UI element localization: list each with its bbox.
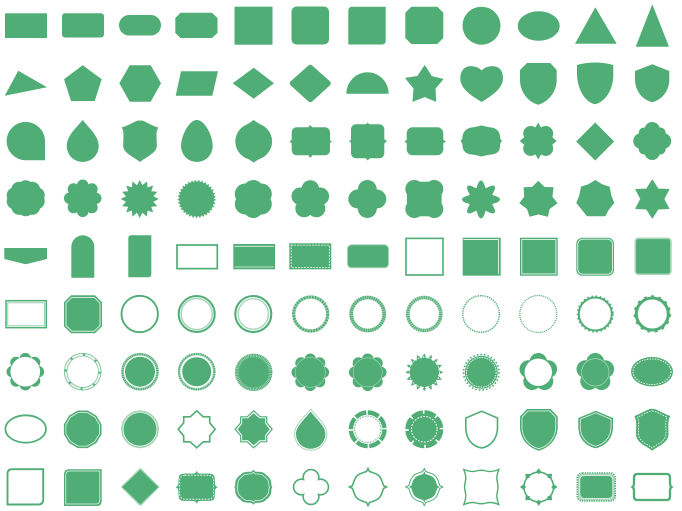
row 6: frames and rings — [6, 295, 670, 333]
plain ring — [122, 296, 158, 332]
row 5: banners and frames — [4, 235, 671, 278]
thin double ring with dots — [64, 353, 101, 390]
octagon with inset — [64, 295, 102, 333]
row 3: drops and ornate shapes — [7, 120, 671, 162]
seal with dotted rim — [179, 354, 214, 390]
burst seal — [405, 353, 443, 391]
seal with dashed rim — [122, 354, 158, 389]
triangle — [575, 7, 617, 44]
notched ring — [578, 296, 613, 332]
ornate fancy badge — [234, 470, 272, 505]
tall rectangle — [128, 235, 151, 277]
scalene triangle — [5, 71, 47, 96]
circle — [462, 7, 500, 45]
two-corner rounded square — [348, 7, 386, 44]
filled segmented badge — [408, 412, 441, 446]
semicircle — [346, 72, 389, 94]
starburst — [121, 180, 159, 218]
rounded square — [292, 6, 329, 44]
ring with dots — [179, 296, 215, 332]
chamfered square — [405, 7, 443, 44]
pinched square — [405, 180, 443, 218]
fancy dashed shield — [634, 409, 670, 451]
wavy frame — [464, 470, 499, 504]
filled square with inset — [64, 469, 102, 506]
dashed rectangle — [289, 243, 331, 269]
five petal flower — [292, 180, 329, 217]
beaded ring light — [408, 298, 441, 330]
tall triangle — [636, 4, 669, 47]
rounded rectangle — [62, 13, 104, 38]
clover — [348, 180, 386, 218]
outline rectangle — [177, 245, 217, 269]
outline eight point star — [178, 411, 215, 448]
shield curved top — [577, 62, 613, 104]
ring with ornaments — [520, 468, 558, 506]
ornate rectangle — [290, 125, 332, 158]
six lobe cloud — [235, 180, 272, 218]
filled square line top right — [463, 238, 501, 276]
drop with outline — [294, 409, 327, 450]
concave diamond outline — [350, 468, 386, 506]
six lobe flower — [7, 180, 45, 216]
pointed shield with inset — [578, 411, 613, 448]
scalloped ring — [6, 353, 44, 391]
row 9: ornate frames — [8, 468, 672, 506]
ellipse — [518, 11, 560, 41]
square diamond — [576, 122, 614, 160]
rounded diamond — [292, 68, 328, 100]
beaded ring — [351, 298, 384, 330]
row 4: flowers and stars — [7, 180, 669, 218]
quatrefoil outline — [294, 470, 328, 504]
pill — [119, 15, 161, 36]
outline ellipse — [5, 415, 46, 443]
filled rounded square with inset — [576, 238, 614, 276]
eight lobe flower — [64, 180, 102, 217]
filled square with light border — [635, 238, 671, 274]
ornate dashed plaque — [176, 471, 218, 504]
circle with light rim — [122, 411, 158, 447]
arch — [71, 235, 94, 278]
filled rectangle with lines — [233, 244, 275, 269]
egg — [181, 120, 213, 162]
row 8: outlined and inset badges — [5, 409, 670, 451]
seal with fine rim — [237, 355, 271, 389]
filled shield with inset — [520, 409, 558, 451]
rectangle — [5, 13, 47, 38]
flared outline plaque — [632, 474, 672, 500]
bumped ring — [634, 296, 670, 332]
diamond — [233, 68, 274, 99]
dashed ellipse — [631, 357, 673, 386]
textured ring — [294, 297, 328, 331]
ornate square — [349, 122, 387, 160]
ornate rectangle filled — [577, 473, 615, 501]
parallelogram — [176, 71, 218, 96]
heart — [460, 66, 503, 102]
row 1: basic shapes — [5, 4, 669, 47]
row 2: polygons and shields — [5, 62, 669, 105]
eight petal flower — [462, 180, 500, 218]
filled flower with ring — [576, 353, 614, 390]
filled scallop faint ring — [349, 354, 387, 391]
dotted ring — [463, 296, 499, 332]
sealed circle — [179, 181, 214, 217]
hexagon — [119, 65, 161, 102]
star — [406, 66, 443, 101]
rounded diamond with border — [122, 469, 159, 505]
outline square — [406, 238, 443, 275]
filled scallop — [292, 354, 329, 391]
pointed circle — [235, 120, 272, 162]
rounded rectangle with border — [348, 245, 388, 268]
segmented ring — [351, 412, 384, 446]
seven point star — [519, 181, 558, 217]
banner — [4, 248, 47, 264]
teardrop corner — [7, 122, 45, 160]
fine dotted ring — [520, 296, 557, 332]
outline shield — [466, 411, 498, 448]
beaded seal — [464, 354, 499, 390]
square — [234, 7, 272, 45]
shield flat top — [520, 63, 557, 105]
pentagon — [64, 65, 102, 101]
dodecagon with inset — [64, 410, 102, 448]
heptagon — [576, 180, 614, 216]
filled square with inset — [520, 238, 558, 276]
bulged plaque — [460, 126, 502, 156]
lobed cross — [633, 122, 671, 160]
shield pointed top — [635, 64, 669, 102]
row 7: badges — [6, 353, 673, 391]
rounded outline square — [8, 469, 43, 504]
filled eight point star — [235, 411, 272, 448]
flower ring — [520, 353, 557, 390]
double outline rectangle — [6, 301, 46, 328]
scalloped diamond — [520, 122, 557, 160]
water drop — [67, 120, 99, 162]
six point star — [636, 180, 669, 218]
concave diamond filled — [406, 468, 443, 506]
double ring — [235, 296, 271, 332]
tabbed rectangle — [404, 127, 446, 155]
chamfered rectangle — [175, 13, 218, 38]
fancy shield — [122, 120, 158, 162]
